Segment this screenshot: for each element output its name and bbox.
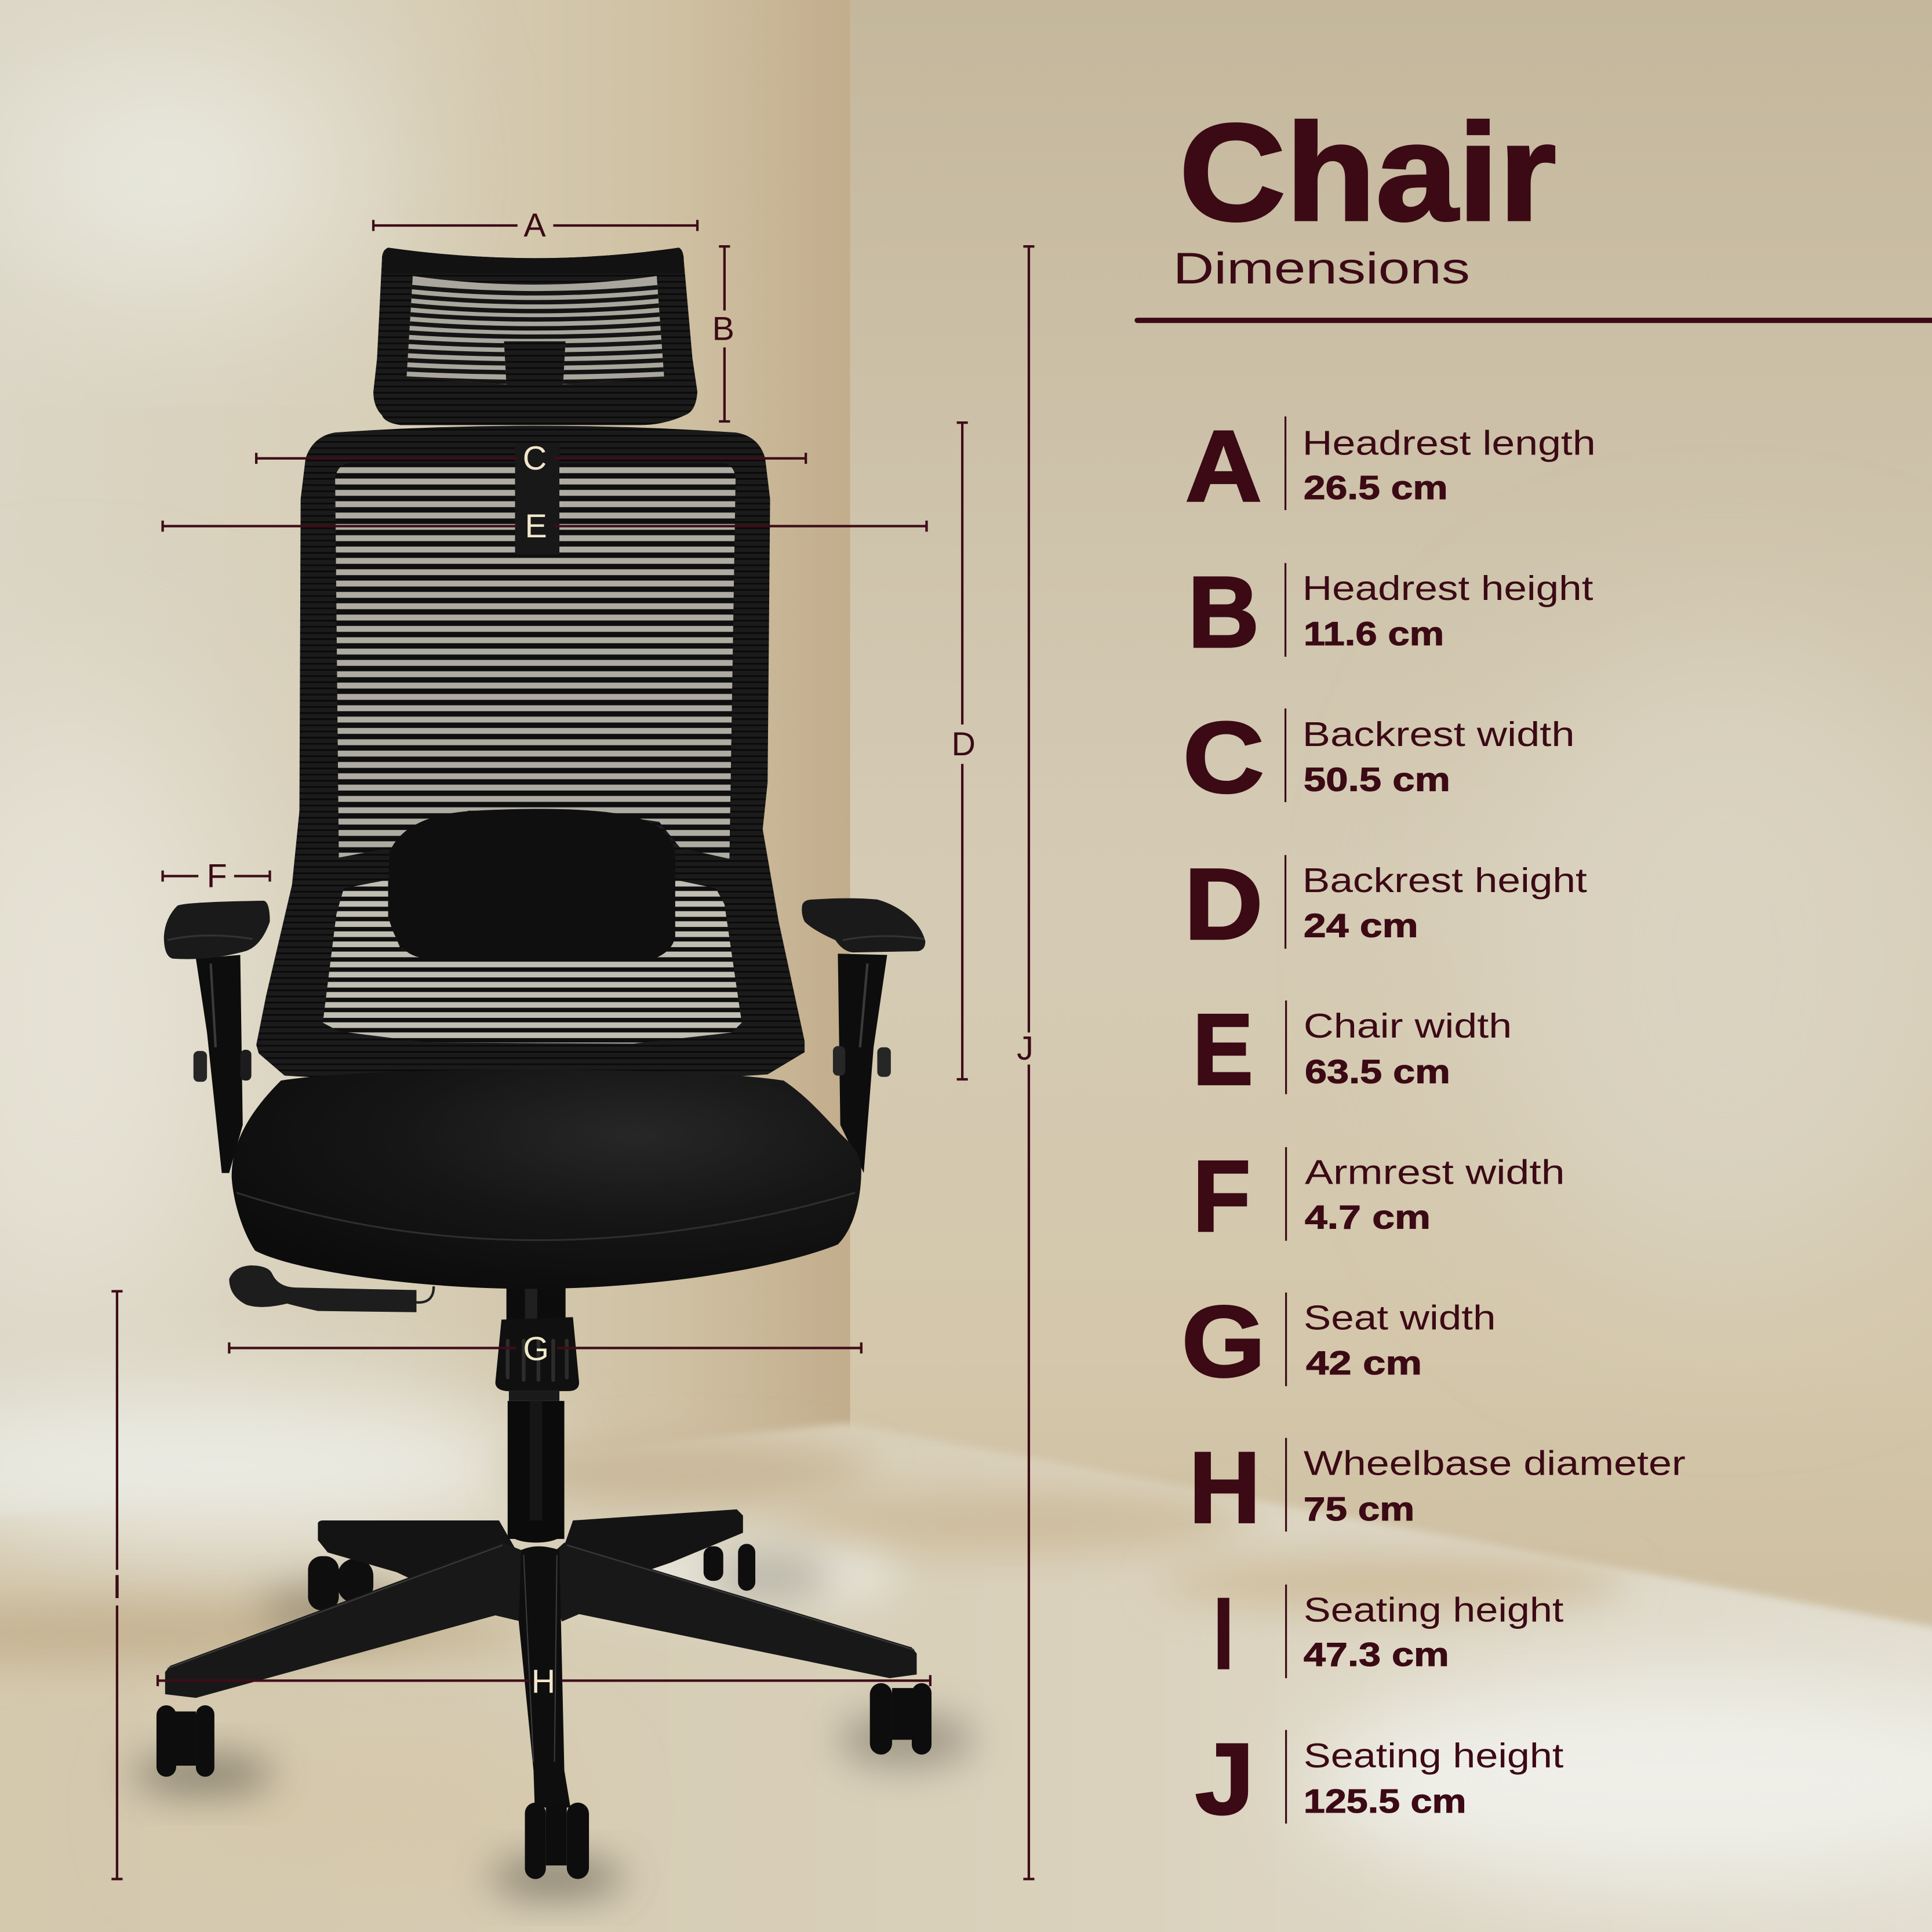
chair: gas cylinder <box>508 1401 565 1542</box>
dimension H: wheelbase diameter: H <box>532 1664 555 1701</box>
spec row C <box>1183 701 1575 814</box>
spec row A <box>1185 409 1596 522</box>
spec row J: J <box>1195 1722 1254 1835</box>
chair: backrest <box>256 425 805 1089</box>
spec row F: 4.7 cm <box>1305 1199 1431 1236</box>
spec row B <box>1188 555 1593 668</box>
heading rule <box>1137 319 1932 322</box>
spec row A: Headrest length <box>1302 423 1596 462</box>
spec row B: Headrest height <box>1302 569 1593 607</box>
spec row H: 75 cm <box>1304 1491 1414 1528</box>
chair: height collar <box>496 1287 579 1401</box>
chair: seat cushion <box>232 1069 861 1289</box>
spec row D: Backrest height <box>1302 861 1587 900</box>
spec row G: 42 cm <box>1306 1345 1422 1382</box>
floor shadows under wheels <box>132 1552 973 1896</box>
dimension A: headrest length: A <box>523 207 546 244</box>
spec row F: F <box>1193 1140 1251 1253</box>
spec row C: C <box>1183 701 1264 814</box>
spec row H: H <box>1189 1431 1261 1544</box>
dimension F: armrest width <box>163 857 270 894</box>
spec row F: Armrest width <box>1305 1153 1565 1192</box>
spec row H: Wheelbase diameter <box>1304 1443 1686 1482</box>
spec row A: A <box>1185 409 1262 522</box>
chair: front wheels <box>157 1683 932 1879</box>
spec row J: 125.5 cm <box>1304 1783 1467 1820</box>
chair: right armrest <box>802 898 925 1173</box>
chair: label backing strip <box>515 443 559 555</box>
chair: rear wheels <box>308 1544 755 1610</box>
spec row J: Seating height <box>1304 1736 1564 1775</box>
backrest: lumbar pad <box>388 809 675 959</box>
spec row E: E <box>1193 993 1253 1106</box>
spec row F <box>1193 1140 1565 1253</box>
dimension J: overall height <box>1017 246 1034 1879</box>
spec row G: G <box>1181 1285 1265 1398</box>
dimension F: armrest width: F <box>207 857 227 894</box>
spec row D: 24 cm <box>1304 908 1418 945</box>
backrest: lower mesh window <box>323 880 742 1043</box>
chair: front base legs <box>165 1542 916 1807</box>
spec row D: D <box>1184 847 1263 960</box>
spec row B: B <box>1188 555 1259 668</box>
spec row C: Backrest width <box>1302 715 1575 754</box>
spec row A: 26.5 cm <box>1304 470 1448 507</box>
backrest: upper mesh window <box>335 463 736 859</box>
subtitle: Dimensions: Dimensions <box>1173 244 1470 293</box>
spec row E: Chair width <box>1304 1006 1512 1045</box>
spec row J <box>1195 1722 1564 1835</box>
dimension H: wheelbase diameter <box>158 1664 930 1701</box>
dimension C: backrest width <box>256 440 806 477</box>
title: Chair: Chair <box>1179 95 1556 249</box>
dimension E: chair width: E <box>525 508 547 545</box>
spec row D <box>1184 847 1587 960</box>
chair illustration <box>157 248 932 1879</box>
spec row I: Seating height <box>1304 1590 1564 1629</box>
spec row E: 63.5 cm <box>1305 1053 1450 1090</box>
dimension G: seat width <box>229 1331 861 1368</box>
dimension J: overall height: J <box>1017 1030 1034 1067</box>
spec row C: 50.5 cm <box>1304 762 1450 799</box>
spec row I <box>1214 1577 1564 1690</box>
spec row I: 47.3 cm <box>1304 1636 1449 1673</box>
spec row G: Seat width <box>1304 1298 1496 1337</box>
spec row G <box>1181 1285 1496 1398</box>
spec row B: 11.6 cm <box>1304 616 1444 653</box>
dimension E: chair width <box>163 508 926 545</box>
dimension C: backrest width: C <box>523 440 547 477</box>
spec row I: I <box>1214 1577 1234 1690</box>
dimension G: seat width: G <box>523 1331 549 1368</box>
chair: adjustment lever <box>229 1265 434 1312</box>
dimension I: seating height: I <box>112 1569 122 1606</box>
dimension A: headrest length <box>373 207 697 244</box>
chair: left armrest <box>164 901 270 1173</box>
dimension B: headrest height <box>712 246 734 421</box>
spec row E <box>1193 993 1512 1106</box>
spec row H <box>1189 1431 1686 1544</box>
chair: headrest <box>373 248 697 425</box>
chair: rear base legs <box>318 1509 743 1595</box>
dimension I: seating height <box>111 1291 123 1879</box>
dimension D: backrest height <box>952 423 976 1079</box>
dimension D: backrest height: D <box>952 726 976 763</box>
dimension B: headrest height: B <box>712 311 734 348</box>
